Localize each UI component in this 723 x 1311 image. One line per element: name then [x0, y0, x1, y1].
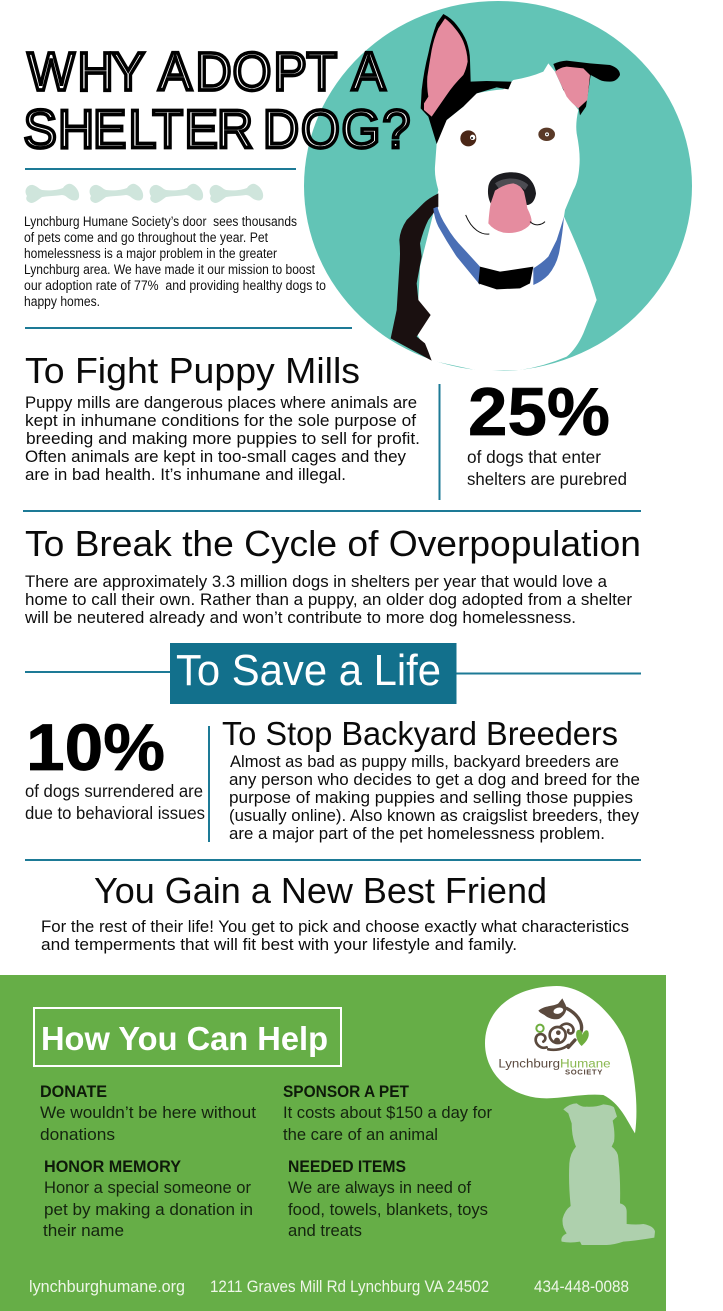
collar black patch — [478, 267, 533, 289]
intro paragraph: our adoption rate of 77% and providing healthy dogs to — [24, 278, 326, 293]
mouth lines — [466, 215, 545, 234]
teal circle behind dog — [304, 1, 692, 371]
stat: 25%: shelters are purebred — [467, 469, 627, 489]
divider — [25, 859, 641, 861]
vertical divider — [438, 384, 440, 500]
stat: 25% — [467, 374, 627, 489]
text: overpopulation: home to call their own. Rather than a puppy, an older dog adopted from a shelter — [25, 590, 632, 609]
blue collar — [433, 207, 564, 285]
footer contact line — [29, 1278, 629, 1296]
heading: To Break the Cycle of Overpopulation: To Break the Cycle of Overpopulation — [25, 523, 641, 564]
item: sponsor a pet — [283, 1082, 492, 1144]
item: honor memory: HONOR MEMORY — [44, 1157, 182, 1176]
stat: 10%: 10% — [26, 710, 165, 784]
panel: how you can help — [0, 975, 666, 1311]
item: needed items — [288, 1157, 488, 1240]
text: backyard breeders: any person who decides to get a dog and breed for the — [229, 770, 640, 789]
footer contact line: 434-448-0088 — [534, 1278, 629, 1296]
right eye — [538, 128, 555, 141]
item: honor memory: their name — [43, 1221, 124, 1240]
tongue — [488, 183, 532, 233]
item: needed items: food, towels, blankets, toys — [288, 1200, 488, 1219]
left ear black patch — [421, 14, 512, 144]
illustration: dog portrait — [391, 14, 620, 371]
heading box: How You Can Help: How You Can Help — [41, 1020, 328, 1057]
heading: You Gain a New Best Friend: You Gain a New Best Friend — [94, 870, 547, 911]
heading box: How You Can Help — [34, 1008, 341, 1066]
nose — [488, 172, 536, 205]
right ear black — [553, 61, 620, 115]
dog body and head — [417, 63, 597, 371]
banner: To Save a Life: To Save a Life — [176, 646, 441, 695]
logo wordmark: SOCIETY — [565, 1067, 602, 1076]
text: backyard breeders: Almost as bad as puppy mills, backyard breeders are — [230, 752, 619, 771]
text: backyard breeders: purpose of making puppies and selling those puppies — [229, 788, 633, 807]
text: puppy mills: Puppy mills are dangerous places where animals are — [25, 393, 417, 412]
row of bones — [26, 184, 263, 203]
right ear pink — [555, 67, 590, 108]
item: sponsor a pet: the care of an animal — [283, 1125, 438, 1144]
item: donate: We wouldn’t be here without — [40, 1103, 256, 1122]
text: backyard breeders: (usually online). Also known as craigslist breeders, they — [229, 806, 639, 825]
text: puppy mills: Often animals are kept in too-small cages and they — [25, 447, 406, 466]
left ear pink — [424, 18, 468, 117]
text: overpopulation: There are approximately 3.3 million dogs in shelters per year that would love a — [25, 572, 608, 591]
dividers beside banner — [25, 671, 641, 674]
title — [24, 42, 410, 160]
item: honor memory — [43, 1157, 253, 1240]
logo wordmark — [498, 1056, 611, 1076]
item: honor memory: pet by making a donation in — [44, 1200, 253, 1219]
intro paragraph: Lynchburg Humane Society’s door sees thousands — [24, 214, 297, 229]
text: backyard breeders — [229, 752, 640, 843]
item: honor memory: Honor a special someone or — [44, 1178, 251, 1197]
item: needed items: We are always in need of — [288, 1178, 471, 1197]
item: needed items: and treats — [288, 1221, 362, 1240]
intro paragraph — [24, 214, 326, 309]
intro paragraph: Lynchburg area. We have made it our mission to boost — [24, 262, 315, 277]
intro paragraph: happy homes. — [24, 294, 100, 309]
divider — [25, 168, 296, 170]
heading: To Stop Backyard Breeders: To Stop Backyard Breeders — [222, 715, 618, 752]
footer contact line: lynchburghumane.org — [29, 1278, 185, 1296]
item: needed items: NEEDED ITEMS — [288, 1157, 406, 1176]
item: sponsor a pet: SPONSOR A PET — [283, 1082, 410, 1101]
text: best friend — [41, 917, 629, 954]
text: puppy mills: breeding and making more puppies to sell for profit. — [26, 429, 420, 448]
title: WHY ADOPT A — [28, 42, 386, 102]
text: puppy mills: are in bad health. It’s inhumane and illegal. — [25, 465, 346, 484]
speech bubble with logo — [485, 986, 636, 1133]
dog silhouette — [561, 1103, 655, 1245]
text: puppy mills: kept in inhumane conditions for the sole purpose of — [25, 411, 416, 430]
intro paragraph: homelessness is a major problem in the greater — [24, 246, 277, 261]
item: donate — [40, 1082, 256, 1144]
vertical divider — [208, 726, 210, 842]
title: SHELTER DOG? — [24, 100, 410, 160]
stat: 10% — [25, 710, 205, 823]
logo wordmark: Lynchburg — [498, 1056, 560, 1070]
item: donate: DONATE — [40, 1082, 107, 1101]
logo mark — [536, 998, 589, 1050]
footer contact line: 1211 Graves Mill Rd Lynchburg VA 24502 — [210, 1278, 489, 1296]
text: best friend: For the rest of their life! You get to pick and choose exactly what characteristics — [41, 917, 629, 936]
stat: 25%: of dogs that enter — [467, 447, 601, 467]
text: puppy mills — [25, 393, 420, 484]
logo wordmark: Humane — [560, 1056, 611, 1070]
stat: 25%: 25% — [468, 374, 610, 450]
item: sponsor a pet: It costs about $150 a day for — [283, 1103, 492, 1122]
stat: 10%: of dogs surrendered are — [25, 781, 203, 801]
left eye — [460, 130, 476, 146]
stat: 10%: due to behavioral issues — [25, 803, 205, 823]
item: donate: donations — [40, 1125, 115, 1144]
divider — [23, 510, 641, 512]
heading: To Fight Puppy Mills: To Fight Puppy Mills — [25, 350, 360, 391]
intro paragraph: of pets come and go throughout the year. Pet — [24, 230, 268, 245]
text: best friend: and temperments that will fit best with your lifestyle and family. — [41, 935, 517, 954]
divider — [25, 327, 352, 329]
left black shoulder — [391, 193, 438, 361]
text: overpopulation — [24, 572, 632, 627]
text: backyard breeders: are a major part of the pet homelessness problem. — [229, 824, 605, 843]
text: overpopulation: will be neutered already and won’t contribute to more dog homelessness. — [24, 608, 576, 627]
